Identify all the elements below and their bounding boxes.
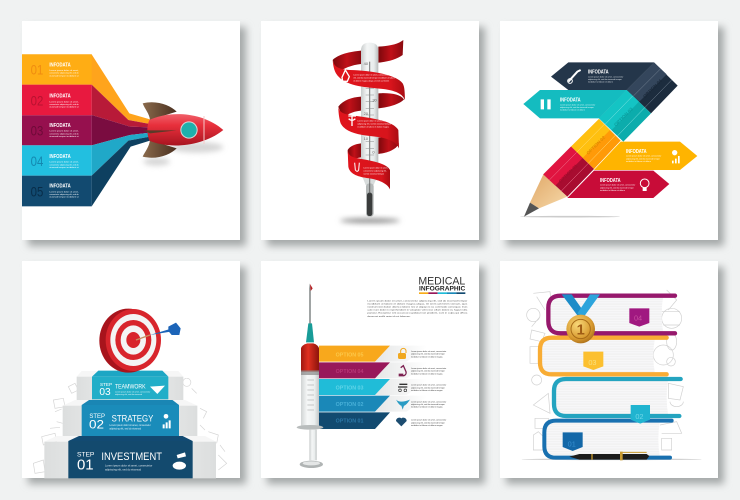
arrow: yellow infodata: INFODATA xyxy=(626,149,647,155)
arrow: navy infodata: incididunt ut labore et dolore xyxy=(588,81,614,84)
step 02 strategy: Lorem ipsum dolor sit amet, consectetur xyxy=(109,424,151,427)
option 01 row xyxy=(319,412,447,429)
arrow: navy infodata: Lorem ipsum dolor sit amet, consectetur xyxy=(588,75,624,78)
book 4 purple xyxy=(548,296,675,333)
ribbon: option 02 red xyxy=(22,85,150,127)
option 05 row: adipiscing elit, sed do eiusmod tempor xyxy=(411,353,445,356)
panel: target stairs infographic xyxy=(22,261,246,484)
ground shadow xyxy=(520,216,620,217)
ribbon: option 03 maroon: consectetur adipiscing elit, sed do xyxy=(49,132,80,135)
option 04 row: OPTION 04 xyxy=(336,369,364,375)
ribbon: option 04 cyan: eiusmod tempor incididunt ut xyxy=(49,166,79,169)
ribbon: option 04 cyan: Lorem ipsum dolor sit amet, xyxy=(49,161,79,164)
step 03 teamwork: 03 xyxy=(99,387,111,398)
arrow: navy infodata: adipiscing elit, sed do eiusmod tempor xyxy=(588,78,622,81)
pencil: OPTION 04 xyxy=(642,78,663,99)
arrow: red infodata: incididunt ut labore et dolore xyxy=(600,189,626,192)
option 03 row xyxy=(319,379,447,395)
pencil: OPTION 03 xyxy=(613,106,634,127)
option 01 row: OPTION 01 xyxy=(336,419,364,425)
ribbon: option 03 maroon: eiusmod tempor incididunt ut xyxy=(49,135,79,138)
doodles behind stairs xyxy=(33,378,227,473)
ribbon front 2: Lorem ipsum dolor sit amet, consectetur xyxy=(357,120,393,123)
arrow: navy infodata: INFODATA xyxy=(588,70,609,76)
icon: fountain pen xyxy=(569,452,649,460)
step 01 investment: adipiscing elit, sed do eiusmod xyxy=(105,467,142,471)
icon: syringe xyxy=(297,283,323,468)
description paragraph: nostrud exercitation ullamco laboris nisi ut aliquip ex ea commodo consequat. Duis xyxy=(367,306,468,309)
description paragraph: Lorem ipsum dolor sit amet, consectetur adipiscing elit, sed do eiusmod tempor xyxy=(367,300,468,303)
ribbon back sections xyxy=(333,40,404,163)
ribbon: option 04 cyan xyxy=(22,133,150,176)
arrow: navy infodata xyxy=(551,62,654,90)
icon: gold medal: 1 xyxy=(577,322,585,338)
ground shadow xyxy=(522,458,702,460)
arrow: yellow infodata: adipiscing elit, sed do eiusmod tempor xyxy=(626,157,660,160)
book 3 orange xyxy=(540,338,667,374)
arrow: red infodata: INFODATA xyxy=(600,178,621,184)
ground shadow xyxy=(340,218,400,223)
arrow: red infodata: Lorem ipsum dolor sit amet, consectetur xyxy=(600,184,636,187)
book 4 purple: 04 xyxy=(634,313,642,322)
ribbon front 3: sed do eiusmod tempor xyxy=(363,172,384,175)
book 3 orange: 03 xyxy=(588,358,596,367)
icon: thermometer: 40 xyxy=(364,61,369,66)
option 02 row xyxy=(319,396,447,412)
arrow: yellow infodata xyxy=(594,142,697,170)
icon: thermometer: 10 xyxy=(364,136,369,141)
step 03 teamwork: adipiscing elit, sed do eiusmod xyxy=(115,393,142,396)
panel: pencil infographic xyxy=(500,21,724,246)
ribbon: option 04 cyan: 04 xyxy=(31,153,44,169)
arrow: teal infodata: incididunt ut labore et dolore xyxy=(560,109,586,112)
step 01 investment: STEP xyxy=(77,452,95,459)
ribbon: option 02 red: eiusmod tempor incididunt ut xyxy=(49,106,79,109)
ribbon front 3 xyxy=(348,150,390,189)
title: INFOGRAPHIC xyxy=(419,287,466,293)
pencil: OPTION 01 xyxy=(558,163,579,184)
option 04 row: incididunt ut labore et dolore magna xyxy=(411,372,443,375)
ribbon: option 03 maroon: 03 xyxy=(31,122,44,138)
ribbon: option 02 red: Lorem ipsum dolor sit amet, xyxy=(49,100,79,103)
ribbon: option 01 yellow: consectetur adipiscing elit, sed do xyxy=(49,72,80,75)
icon: thermometer: 0 xyxy=(372,149,375,154)
ribbon front 2 xyxy=(338,107,399,148)
title xyxy=(418,275,466,294)
step 01 investment: Lorem ipsum dolor sit amet, consectetur xyxy=(105,464,152,468)
bookmark 02 xyxy=(631,405,650,424)
step 02 strategy: STRATEGY xyxy=(112,414,153,424)
step 03 teamwork: Lorem ipsum dolor sit amet, consectetur xyxy=(115,390,151,393)
ribbon: option 04 cyan: consectetur adipiscing elit, sed do xyxy=(49,163,80,166)
ribbon: option 02 red: 02 xyxy=(31,92,44,108)
pencil xyxy=(524,62,678,217)
doodles around books xyxy=(527,290,683,450)
ribbon: option 01 yellow: INFODATA xyxy=(49,62,71,68)
panel: rocket infographic xyxy=(22,21,246,246)
icon: thermometer xyxy=(361,43,378,217)
option 05 row: OPTION 05 xyxy=(336,353,364,359)
option 03 row: incididunt ut labore et dolore magna xyxy=(411,389,443,392)
ribbon: option 03 maroon xyxy=(22,115,150,145)
ribbon: option 05 navy: Lorem ipsum dolor sit amet, xyxy=(49,190,79,193)
ribbon: option 01 yellow: eiusmod tempor incididunt ut xyxy=(49,74,79,77)
panel: books infographic xyxy=(500,261,724,484)
step 02 strategy: STEP xyxy=(89,414,105,420)
icon: gold medal xyxy=(562,294,600,343)
icon: target and dart xyxy=(99,309,181,373)
option 05 row: incididunt ut labore et dolore magna xyxy=(411,355,443,358)
ribbon: option 05 navy: 05 xyxy=(31,184,44,200)
ribbon: option 05 navy: eiusmod tempor incididunt ut xyxy=(49,196,79,199)
arrow: red infodata xyxy=(567,171,669,198)
book 1 blue xyxy=(544,421,672,458)
arrow: teal infodata xyxy=(523,90,627,118)
arrow: yellow infodata: Lorem ipsum dolor sit amet, consectetur xyxy=(626,155,662,158)
option 04 row: adipiscing elit, sed do eiusmod tempor xyxy=(411,370,445,373)
ribbon: option 03 maroon: Lorem ipsum dolor sit amet, xyxy=(49,130,79,133)
option 01 row: Lorem ipsum dolor sit amet, consectetur xyxy=(411,419,447,422)
arrow: yellow infodata: incididunt ut labore et dolore xyxy=(626,160,652,163)
step 03 teamwork xyxy=(77,371,183,400)
ribbon: option 01 yellow: 01 xyxy=(31,62,44,78)
step 02 strategy: 02 xyxy=(89,417,104,431)
ribbon front 1: Lorem ipsum dolor sit amet, consectetur adipiscing xyxy=(353,73,398,76)
step 01 investment xyxy=(44,436,216,478)
ribbon: option 02 red: consectetur adipiscing elit, sed do xyxy=(49,103,80,106)
ribbon: option 05 navy xyxy=(22,137,150,206)
title: MEDICAL xyxy=(418,275,465,287)
arrow: teal infodata: INFODATA xyxy=(560,98,581,104)
ribbon front 1: et dolore magna aliqua ut enim ad minim xyxy=(353,79,390,82)
ribbon: option 03 maroon: INFODATA xyxy=(49,123,71,129)
description paragraph: incididunt ut labore et dolore magna aliqua. Ut enim ad minim veniam, quis xyxy=(367,303,469,306)
option 03 row: Lorem ipsum dolor sit amet, consectetur xyxy=(411,384,447,387)
book 2 teal xyxy=(554,379,681,416)
panel: thermometer infographic xyxy=(261,21,485,246)
bookmark 02: 02 xyxy=(635,412,643,421)
option 05 row: Lorem ipsum dolor sit amet, consectetur xyxy=(411,350,447,353)
panel: medical syringe infographic xyxy=(261,261,485,484)
ribbon: option 05 navy: INFODATA xyxy=(49,184,71,190)
icon: thermometer: 20 xyxy=(364,111,369,116)
description paragraph: deserunt mollit anim id est laborum. xyxy=(367,315,411,318)
pencil: OPTION 02 xyxy=(586,135,607,156)
step 01 investment: 01 xyxy=(77,458,94,474)
option 02 row: Lorem ipsum dolor sit amet, consectetur xyxy=(411,400,447,403)
option 03 row: OPTION 03 xyxy=(336,386,364,392)
arrow: red infodata: adipiscing elit, sed do eiusmod tempor xyxy=(600,186,634,189)
option 01 row: adipiscing elit, sed do eiusmod tempor xyxy=(411,421,445,424)
icon: rocket xyxy=(143,102,223,166)
ribbon front 2: adipiscing elit, sed do eiusmod tempor xyxy=(357,123,391,126)
ribbon front 1: elit, sed do eiusmod tempor incididunt ut labore xyxy=(353,76,396,79)
ribbon front 2: incididunt ut labore et dolore magna xyxy=(357,126,390,129)
option 02 row: incididunt ut labore et dolore magna xyxy=(411,406,443,409)
option 05 row xyxy=(319,346,447,362)
step 02 strategy xyxy=(63,399,197,436)
step 03 teamwork: TEAMWORK xyxy=(115,385,146,391)
ribbon front 3: Lorem ipsum dolor sit amet, xyxy=(363,166,388,169)
ribbon: option 04 cyan: INFODATA xyxy=(49,154,71,160)
arrow: teal infodata: adipiscing elit, sed do eiusmod tempor xyxy=(560,106,594,109)
step 01 investment: INVESTMENT xyxy=(101,451,162,463)
option 04 row xyxy=(319,362,447,378)
description paragraph: aute irure dolor in reprehenderit in voluptate velit esse cillum dolore eu fugiat nulla xyxy=(367,309,468,312)
option 02 row: OPTION 02 xyxy=(336,402,364,408)
description paragraph: pariatur. Excepteur sint occaecat cupidatat non proident, sunt in culpa qui officia xyxy=(367,312,468,315)
step 02 strategy: adipiscing elit, sed do eiusmod xyxy=(109,427,142,430)
icon: thermometer: 30 xyxy=(372,98,378,103)
ribbon front 3: consectetur adipiscing elit, xyxy=(363,169,387,172)
option 04 row: Lorem ipsum dolor sit amet, consectetur xyxy=(411,367,447,370)
ribbon: option 01 yellow: Lorem ipsum dolor sit amet, xyxy=(49,69,79,72)
option 03 row: adipiscing elit, sed do eiusmod tempor xyxy=(411,386,445,389)
ribbon: option 05 navy: consectetur adipiscing elit, sed do xyxy=(49,193,80,196)
ribbon: option 01 yellow xyxy=(22,54,150,124)
ribbon: option 02 red: INFODATA xyxy=(49,94,71,100)
step 03 teamwork: STEP xyxy=(100,382,112,387)
option 02 row: adipiscing elit, sed do eiusmod tempor xyxy=(411,403,445,406)
option 01 row: incididunt ut labore et dolore magna xyxy=(411,424,443,427)
book 1 blue: 01 xyxy=(568,439,576,448)
ribbon front 1 xyxy=(333,60,405,100)
arrow: teal infodata: Lorem ipsum dolor sit amet, consectetur xyxy=(560,103,596,106)
